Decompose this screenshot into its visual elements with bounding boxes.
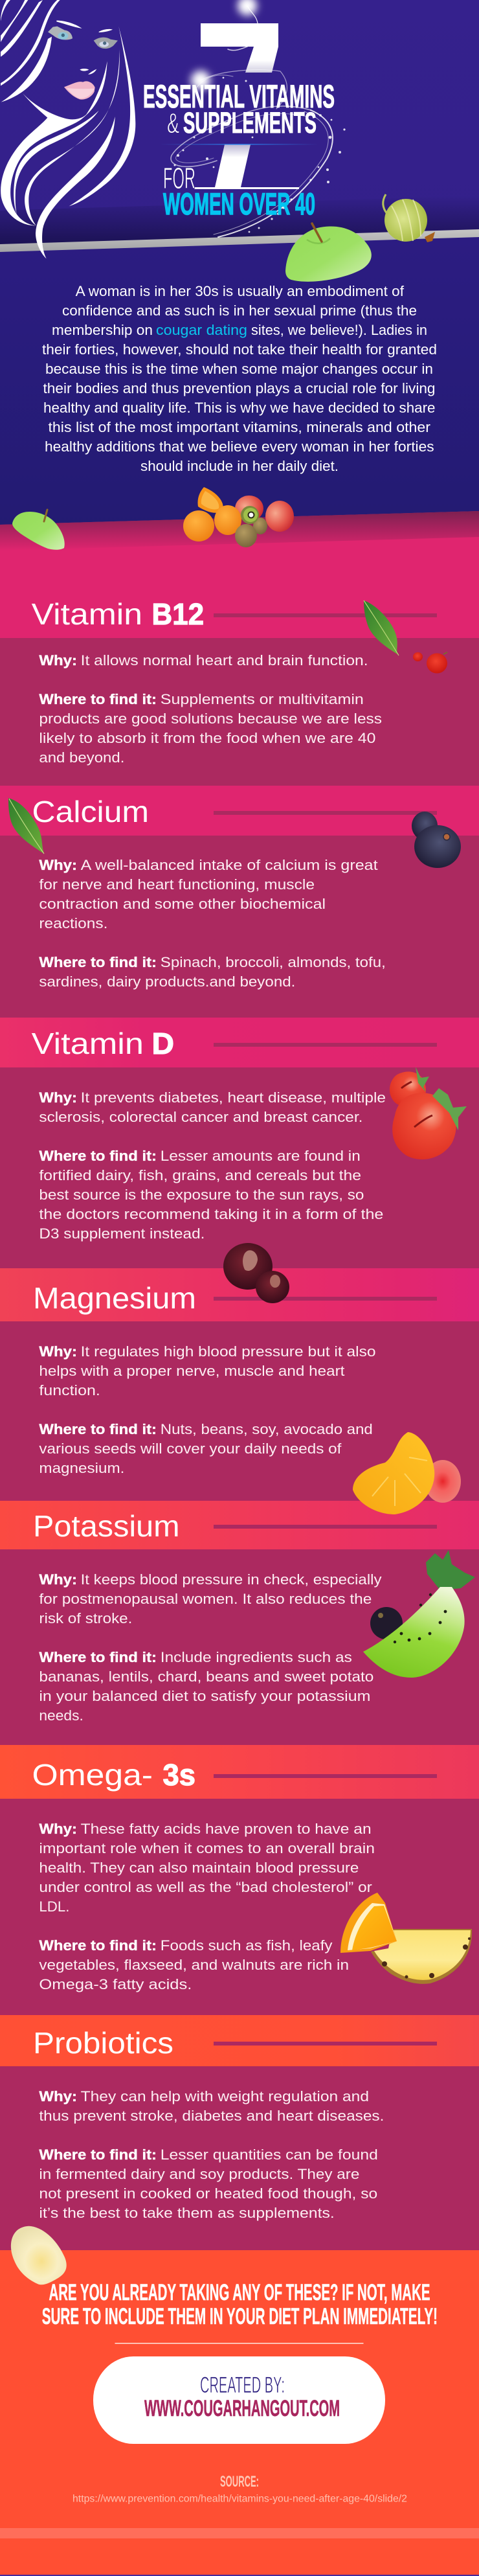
text block: where: Where to find it: <box>39 1148 157 1164</box>
title: ESSENTIAL VITAMINS <box>143 78 335 115</box>
heading: Omega-3s: Omega- <box>32 1758 153 1792</box>
text block: where: needs. <box>39 1707 84 1724</box>
text block: why: important role when it comes to an overall brain <box>39 1840 375 1856</box>
heading: Probiotics <box>33 2026 437 2060</box>
heading: Omega-3s <box>32 1758 437 1792</box>
icon: kiwi slice, leaf and currant <box>363 1550 475 1678</box>
panel: Probiotics <box>0 2015 479 2250</box>
text block: why: health. They can also maintain blood pressure <box>39 1860 359 1876</box>
text block: where: Lesser quantities can be found <box>161 2147 378 2163</box>
text block: where: Nuts, beans, soy, avocado and <box>161 1421 373 1437</box>
text block: why: It allows normal heart and brain function. <box>81 652 368 668</box>
text block: where: the doctors recommend taking it in a form of the <box>39 1206 383 1222</box>
section body <box>0 1067 479 1268</box>
text block: why: for nerve and heart functioning, muscle <box>39 876 315 893</box>
section band <box>0 1268 479 1321</box>
icon: strawberries <box>390 1067 467 1159</box>
icon: fruit cluster <box>183 487 294 547</box>
text block: where <box>39 1649 373 1724</box>
panel: footer <box>0 2226 479 2576</box>
text block: introduction: should include in her daily diet. <box>140 458 339 474</box>
text block: why: Why: <box>39 652 77 668</box>
text block: why: LDL. <box>39 1898 69 1915</box>
text block: where <box>39 1148 383 1242</box>
text block: why: Why: <box>39 1343 77 1360</box>
text block: where: Include ingredients such as <box>161 1649 352 1665</box>
heading: Vitamin B12: Vitamin <box>32 597 142 631</box>
icon: pineapple and orange slices <box>340 1893 472 1984</box>
icon: green apple <box>285 223 372 282</box>
heading: Vitamin D: Vitamin <box>32 1027 144 1060</box>
closing call to action <box>42 2280 438 2329</box>
title: FOR <box>163 161 195 195</box>
text block: where: bananas, lentils, chard, beans and sweet potato <box>39 1669 373 1685</box>
text block: introduction <box>42 283 437 474</box>
text block: where <box>39 954 386 990</box>
source: https://www.prevention.com/health/vitamins-you-need-after-age-40/slide/2 <box>72 2494 407 2504</box>
text block: where: Where to find it: <box>39 1649 157 1665</box>
section band <box>0 1018 479 1067</box>
text block: where: Omega-3 fatty acids. <box>39 1976 192 1992</box>
icon: banana slice <box>11 2226 67 2285</box>
text block: why: Why: <box>39 857 77 873</box>
title: SUPPLEMENTS <box>183 106 317 139</box>
text block: where: sardines, dairy products.and beyond. <box>39 974 295 990</box>
heading: Potassium: Potassium <box>33 1509 180 1543</box>
text block: where: best source is the exposure to the sun rays, so <box>39 1187 364 1203</box>
panel: Omega-3s <box>0 1745 479 2015</box>
text block: why <box>39 857 378 931</box>
text block: why: It keeps blood pressure in check, especially <box>81 1571 382 1588</box>
text block: why <box>39 1089 386 1125</box>
section band <box>0 786 479 836</box>
text block: introduction: their bodies and thus prevention plays a crucial role for living <box>43 380 435 396</box>
text block: why: thus prevent stroke, diabetes and heart diseases. <box>39 2108 384 2124</box>
heading: Magnesium: Magnesium <box>33 1281 196 1315</box>
text block: where <box>39 2147 378 2221</box>
text block: where: and beyond. <box>39 749 124 766</box>
text block: why: Why: <box>39 1571 77 1588</box>
section band <box>0 2015 479 2066</box>
icon: cherries <box>223 1243 289 1303</box>
text block: why: for postmenopausal women. It also reduces the <box>39 1591 372 1607</box>
text block: why: sclerosis, colorectal cancer and breast cancer. <box>39 1109 362 1125</box>
text block: introduction: healthy and quality life. This is why we have decided to share <box>43 400 435 416</box>
section body <box>0 836 479 1018</box>
text block: why: Why: <box>39 2088 77 2104</box>
text block: why: It prevents diabetes, heart disease, multiple <box>81 1089 386 1106</box>
text block: where: not present in cooked or heated food though, so <box>39 2185 377 2202</box>
decorative numeral 7 <box>161 23 318 189</box>
panel: Vitamin D <box>0 1018 479 1268</box>
credit pill: CREATED BY: <box>200 2373 285 2398</box>
text block: why: These fatty acids have proven to have an <box>81 1821 372 1837</box>
text block: where: likely to absorb it from the food when we are 40 <box>39 730 375 746</box>
credit pill: WWW.COUGARHANGOUT.COM <box>144 2396 340 2421</box>
panel: Vitamin B12 <box>0 597 479 786</box>
section body <box>0 1799 479 2015</box>
text block: where: in fermented dairy and soy products. They are <box>39 2166 359 2182</box>
section body <box>0 638 479 786</box>
text block: where <box>39 691 382 766</box>
text block: where: Where to find it: <box>39 1421 157 1437</box>
icon: gooseberry <box>380 194 435 246</box>
text block: introduction: healthy additions that we believe every woman in her forties <box>45 439 434 455</box>
icon: green leaf <box>364 600 399 655</box>
text block: introduction: cougar dating <box>156 322 247 338</box>
section body <box>0 1321 479 1501</box>
text block: where: Supplements or multivitamin <box>161 691 364 707</box>
title <box>143 78 335 221</box>
source: SOURCE: <box>220 2473 259 2491</box>
text block: where: it’s the best to take them as supplements. <box>39 2205 335 2221</box>
icon: left green apple <box>12 510 65 550</box>
text block: where: Lesser amounts are found in <box>161 1148 361 1164</box>
heading: Vitamin B12: B12 <box>151 597 204 631</box>
heading: Calcium <box>32 795 437 828</box>
title: & <box>167 108 179 139</box>
text block: introduction: this list of the most important vitamins, minerals and other <box>48 419 430 435</box>
heading: Vitamin D <box>32 1027 437 1060</box>
text block: why: risk of stroke. <box>39 1610 132 1626</box>
heading: Magnesium <box>33 1281 437 1315</box>
text block: where: Where to find it: <box>39 2147 157 2163</box>
section body <box>0 1549 479 1745</box>
text block: why: function. <box>39 1382 100 1398</box>
heading: Probiotics: Probiotics <box>33 2026 173 2060</box>
heading: Vitamin B12 <box>32 597 437 631</box>
panel: hero header <box>0 0 479 282</box>
title: WOMEN OVER 40 <box>163 187 315 221</box>
text block: where <box>39 1937 349 1992</box>
text block: where: fortified dairy, fish, grains, and cereals but the <box>39 1167 361 1183</box>
panel: introduction <box>12 283 437 550</box>
text block: where: Spinach, broccoli, almonds, tofu, <box>161 954 386 970</box>
text block: introduction: because this is the time when some major changes occur in <box>45 361 433 377</box>
credit pill <box>93 2356 385 2444</box>
text block: why: They can help with weight regulation and <box>81 2088 369 2104</box>
text block: why <box>39 1343 376 1398</box>
text block: introduction: membership on <box>52 322 153 338</box>
text block: why: contraction and some other biochemical <box>39 896 326 912</box>
grey diagonal strip <box>0 229 479 252</box>
text block: why: It regulates high blood pressure but it also <box>81 1343 376 1360</box>
text block: introduction: sites, we believe!). Ladies in <box>251 322 427 338</box>
icon: tangerine segment and raspberry <box>353 1432 461 1514</box>
text block: why: reactions. <box>39 915 107 931</box>
section body <box>0 2066 479 2250</box>
icon: blueberries <box>412 812 461 868</box>
magic sparkle swirl <box>171 0 346 237</box>
source <box>72 2473 407 2504</box>
icon: red berries <box>413 652 447 674</box>
text block: where: Where to find it: <box>39 1937 157 1954</box>
section band <box>0 1501 479 1549</box>
text block: where: magnesium. <box>39 1460 124 1476</box>
text block: introduction: confidence and as such is in her sexual prime (thus the <box>62 302 417 319</box>
text block: where: in your balanced diet to satisfy your potassium <box>39 1688 370 1704</box>
text block: why <box>39 1821 375 1915</box>
text block: where: Where to find it: <box>39 691 157 707</box>
footer background <box>0 2250 479 2575</box>
panel: Magnesium <box>0 1243 479 1501</box>
text block: where: Foods such as fish, leafy <box>161 1937 333 1954</box>
text block: where: products are good solutions because we are less <box>39 711 382 727</box>
text block: why: A well-balanced intake of calcium is great <box>81 857 378 873</box>
icon: green leaf <box>8 798 44 854</box>
text block: why: Why: <box>39 1821 77 1837</box>
illustration: woman with long hair <box>1 0 135 258</box>
panel: Potassium <box>0 1432 479 1745</box>
text block: where <box>39 1421 373 1476</box>
heading: Vitamin D: D <box>151 1027 174 1060</box>
heading: Omega-3s: 3s <box>163 1758 195 1792</box>
text block: where: Where to find it: <box>39 954 157 970</box>
text block: why: Why: <box>39 1089 77 1106</box>
text block: why: under control as well as the “bad cholesterol” or <box>39 1879 372 1895</box>
text block: where: vegetables, flaxseed, and walnuts are rich in <box>39 1957 349 1973</box>
section band <box>0 1745 479 1799</box>
panel: Calcium <box>0 786 479 1018</box>
text block: why <box>39 2088 384 2124</box>
text block: introduction: their forties, however, should not take their health for granted <box>42 341 437 358</box>
text block: where: D3 supplement instead. <box>39 1225 205 1242</box>
text block: introduction: A woman is in her 30s is usually an embodiment of <box>76 283 405 299</box>
heading: Calcium: Calcium <box>32 795 149 828</box>
heading: Potassium <box>33 1509 437 1543</box>
text block: why: helps with a proper nerve, muscle and heart <box>39 1363 344 1379</box>
text block: why <box>39 1571 382 1626</box>
text block: where: various seeds will cover your daily needs of <box>39 1441 342 1457</box>
